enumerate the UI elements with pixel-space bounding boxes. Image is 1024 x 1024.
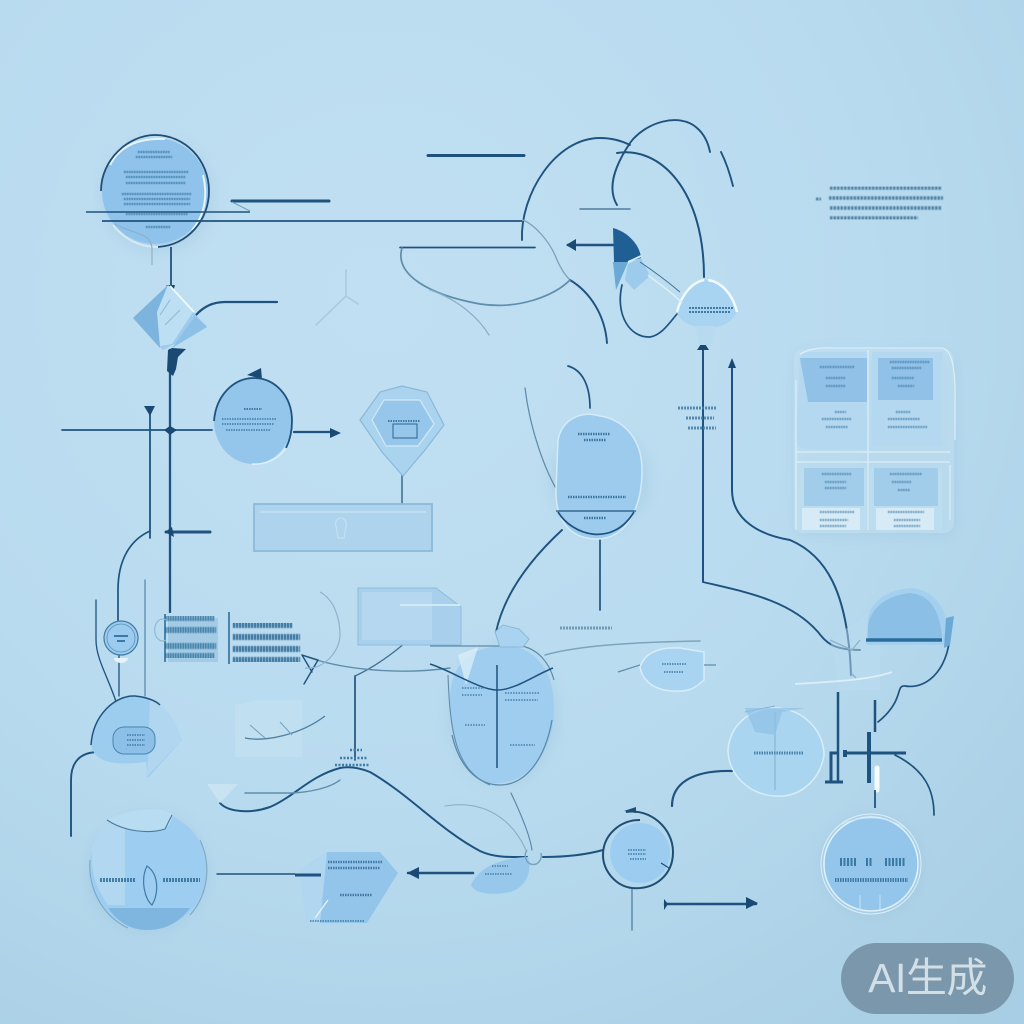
badge: AI生成 xyxy=(841,943,1014,1014)
panel: 2x2 card grid xyxy=(794,348,955,533)
node: small lens xyxy=(104,621,138,663)
node: center large capsule xyxy=(430,625,554,785)
icon: knot cluster xyxy=(335,750,370,765)
text block: faint caption xyxy=(560,626,612,630)
node: pentagon label xyxy=(295,852,398,923)
node: lower-right blob xyxy=(728,706,824,796)
node: left shield xyxy=(91,696,182,778)
badge: AI生成: AI生成 xyxy=(868,955,987,1001)
node: hexagon xyxy=(360,386,444,476)
node: bottom-right circle xyxy=(821,814,921,914)
icon: funnel shape xyxy=(613,228,682,303)
node: small droplet xyxy=(471,850,541,894)
arrowheads xyxy=(144,239,758,910)
icon: cross bracket xyxy=(825,692,906,808)
text block: data table xyxy=(155,592,340,680)
panel: pale tab card xyxy=(358,588,461,645)
icon: pale wedge xyxy=(207,784,238,803)
soft shadows xyxy=(88,140,955,932)
node: top-right teardrop xyxy=(677,280,737,345)
node: center capsule xyxy=(556,414,642,539)
node: right dome xyxy=(795,588,954,690)
node: small lozenge xyxy=(618,648,716,691)
text block: top-right paragraph xyxy=(816,188,943,218)
node: tilted cube xyxy=(133,285,207,350)
text block: small label xyxy=(678,408,716,428)
node: top-left circle xyxy=(86,135,522,290)
connector network xyxy=(62,120,950,930)
node: lower-left circle xyxy=(89,809,207,930)
node: ringed circle xyxy=(603,807,673,888)
node: circle with arrows xyxy=(214,378,292,464)
panel: wide bar xyxy=(254,504,432,551)
panel: faint note xyxy=(235,700,325,757)
